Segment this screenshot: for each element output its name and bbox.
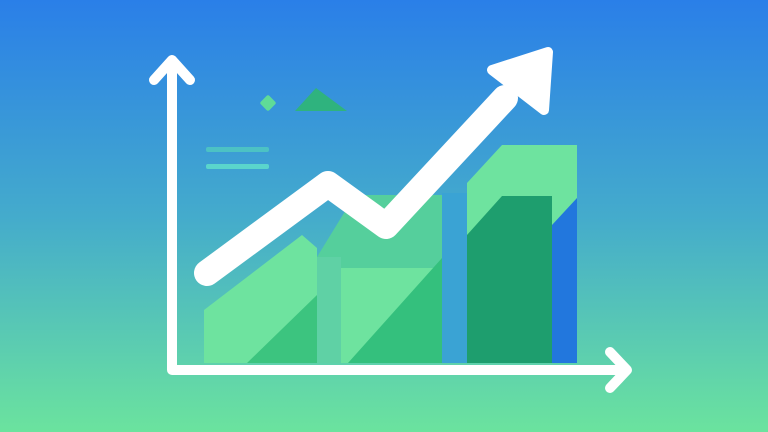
blue column [442, 193, 467, 363]
back shape bar 2 [317, 195, 442, 363]
bar 1 [204, 235, 317, 363]
bar 2 [341, 268, 442, 363]
axes [154, 60, 627, 388]
bar 3 [467, 145, 577, 363]
column between bars 1-2 [317, 257, 341, 363]
bar chart [204, 145, 577, 363]
trend arrow [207, 52, 548, 273]
decorative icons: diamond, triangle, lines [206, 88, 347, 169]
